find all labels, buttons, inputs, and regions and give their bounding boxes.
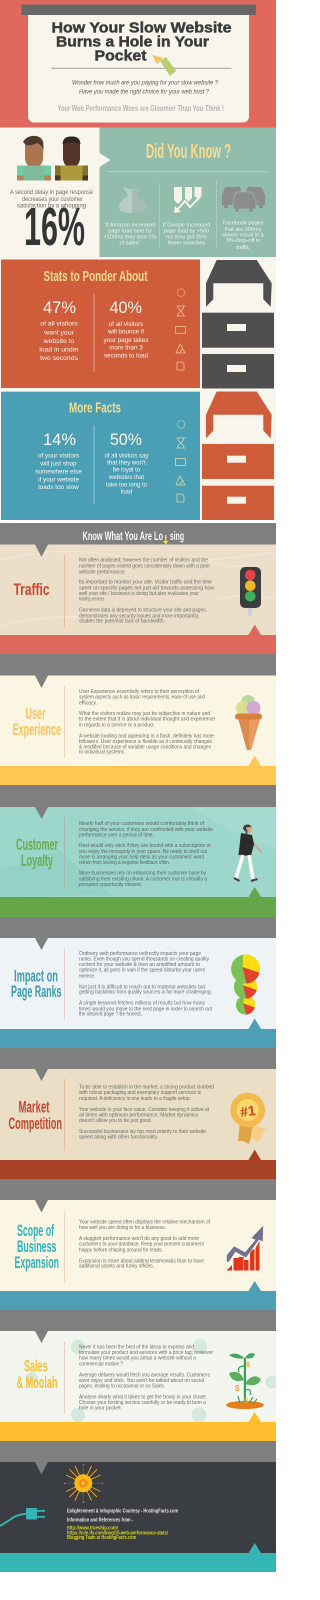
fact: Google: If Google increased: [163, 223, 210, 229]
panel: more facts: [1, 392, 200, 520]
statement text: [10, 190, 94, 210]
body text: Ordinary web performance indirectly impacts your page: [79, 951, 201, 957]
heading: Impact on: [14, 967, 58, 986]
fact: Facebook: 3%-drop-off in: [226, 238, 260, 244]
body text: More businesses rely on enhancing their customer base by: [79, 871, 206, 877]
body text: required. A deficiency is one leads to a fragile setup.: [79, 1096, 191, 1102]
icon: number one badge: #1: [239, 1102, 257, 1120]
icon: rising chart: [226, 1225, 264, 1270]
icon: yellow arrow: [163, 535, 168, 544]
reference links: http://www.trueship.com/: [67, 1525, 119, 1531]
icon: sun: [64, 1464, 103, 1503]
panel: user experience: [0, 654, 276, 785]
body text: Not often analysed; however the number of visitors and the: [79, 558, 208, 564]
subtitle questions: Have you made the right choice for your web host ?: [79, 88, 209, 96]
body text: happy before chasing around for leads.: [79, 1247, 163, 1253]
body text: [79, 1084, 214, 1141]
panel: did you know: [100, 128, 276, 257]
fact: Facebook: traffic: [236, 245, 250, 251]
icon: pencil: [152, 55, 176, 76]
body text: content for your website & then an amplified amount to: [79, 962, 200, 968]
stat 40%: of all visitors: [109, 321, 143, 328]
body text: hosting services.: [79, 597, 105, 603]
body text: efficacy.: [79, 700, 97, 706]
fact: Facebook: slower result in a: [222, 233, 265, 239]
body text: to individual systems .: [79, 750, 127, 756]
panel: traffic: [0, 523, 276, 654]
heading: Customer: [16, 835, 58, 854]
heading: Market: [18, 1098, 50, 1117]
body text: Rest would only stick if they are bound with a subscription or: [79, 843, 211, 849]
reference links: Blogging Team at HostingFacts.com: [67, 1535, 136, 1541]
body text: refrain from leaving a negative feedback often.: [79, 860, 170, 866]
body text: User Experience essentially refers to their perception of: [79, 689, 199, 695]
heading: [11, 967, 62, 1001]
body text: customers to your database. Keep your present customers: [79, 1242, 204, 1248]
title: [52, 20, 232, 64]
icon: walking person: [234, 824, 262, 881]
heading: Sales: [24, 1357, 48, 1376]
heading: [14, 1221, 59, 1272]
icon: power plug: [0, 1508, 45, 1526]
stat 50%: load: [121, 490, 132, 496]
title: Burns a Hole in Your: [56, 34, 209, 50]
heading: Experience: [12, 720, 61, 739]
body text: number of pages visited goes considerably down with a poor: [79, 564, 210, 570]
icon: falling chart: [174, 187, 202, 213]
icon: dark filing cabinet: [202, 260, 274, 388]
stat 14%: 14%: [43, 430, 76, 449]
body text: [79, 1219, 210, 1270]
panel: impact on page ranks: [0, 917, 276, 1048]
body text: pages, leading to occasional or no Sales.: [79, 1384, 165, 1390]
stat 47%: load in under: [39, 346, 79, 353]
body text: Never it has been the best of the ideas to express and: [79, 1344, 194, 1350]
stat 50%: take too long to: [106, 482, 148, 488]
body text: Nearly half of your customers would comfortably think of: [79, 821, 204, 827]
body text: [79, 689, 215, 756]
body text: Your website speed often displays the relative mechanism of: [79, 1219, 210, 1225]
heading: Scope of: [17, 1221, 54, 1240]
body text: What the visitors realize may just be subjective in nature and: [79, 711, 210, 717]
body text: more in arranging your help desk as your customers' wont: [79, 855, 204, 861]
body text: commercial motive ?: [79, 1361, 123, 1367]
panel: stats to ponder about: [1, 260, 200, 388]
body text: wont enjoy and stick. You won't be talked about on social: [79, 1378, 204, 1384]
icon: number one badge: [231, 1093, 266, 1144]
body text: changing the service, if they are confronted with poor website: [79, 827, 213, 833]
icon: cars: [222, 187, 265, 212]
fact: Facebook: that are 500ms: [225, 227, 262, 233]
reference links: [67, 1525, 168, 1541]
body text: [79, 1344, 213, 1411]
stat 47%: of all visitors: [40, 321, 78, 328]
body text: followers. User experience is flexible as it continually changes: [79, 739, 212, 745]
body text: ranks. Even though you spend thousands on creating quality: [79, 957, 209, 963]
body text: doesn't allow you to be just good.: [79, 1118, 152, 1124]
body text: Choose your hosting service carefully or be ready to burn a: [79, 1400, 206, 1406]
heading: [12, 704, 61, 739]
body text: To be able to establish in the market, a strong product clubbed: [79, 1084, 214, 1090]
heading: User: [26, 704, 46, 723]
body text: Successful businesses lay top most priority to their website: [79, 1129, 206, 1135]
stat 50%: 50%: [110, 430, 142, 449]
heading: [8, 1098, 62, 1133]
stat 40%: seconds to load: [104, 352, 149, 359]
icon: orange filing cabinet: [202, 392, 274, 520]
stat 14%: of your visitors: [38, 452, 79, 459]
fact: Facebook: [222, 220, 265, 251]
body text: how well you are doing in for a business.: [79, 1225, 166, 1231]
stat 40%: more than 3: [109, 345, 143, 352]
icon column: [176, 289, 186, 370]
body text: in regards to a service or a product.: [79, 722, 155, 728]
stat 40%: 40%: [110, 298, 142, 317]
credits text: Information and References from -: [67, 1518, 133, 1524]
icon: money plant: $: [235, 1384, 240, 1393]
stat 50%: that they won't: [107, 460, 146, 466]
body text: [79, 821, 213, 888]
body text: Its important to monitor your site. Visitor traffic and the time: [79, 580, 212, 586]
body text: additional assets and funky offices.: [79, 1264, 154, 1270]
panel: credits footer: [0, 1441, 276, 1572]
reference links: https://cdn.ify.com/blog/15-web-performance-stats/: [67, 1530, 168, 1536]
body text: hole in your pocket.: [79, 1405, 122, 1411]
body text: Garnered data is deployed to structure your site and pages,: [79, 608, 207, 614]
fact: Facebook: Facebook pages: [223, 220, 264, 226]
decorative leaf pattern: [26, 1339, 278, 1422]
body text: times would you move to the next page in order to search out: [79, 1006, 212, 1012]
heading: [16, 835, 58, 870]
big number 16%: 16%: [24, 197, 85, 257]
statement text: decreases your customer: [22, 197, 83, 203]
body text: Average delivery would fetch you average results. Customers: [79, 1372, 210, 1378]
heading: Loyalty: [21, 851, 53, 870]
stat 40%: your page takes: [104, 337, 148, 344]
body text: prospect opportunity missed.: [79, 882, 142, 888]
icon: money plant: $: [246, 1362, 250, 1369]
stat 47%: website to: [43, 338, 75, 345]
body text: A website loading and appearing in a flash, definitely has more: [79, 733, 214, 739]
icon: stacked balls: [231, 954, 260, 1015]
fact: Google: ms they get 25%: [166, 235, 207, 241]
body text: speed along with other functionality.: [79, 1135, 158, 1141]
stat 47%: two seconds: [40, 355, 78, 362]
body text: demonstrates any security issues and more importantly,: [79, 613, 199, 619]
title: How Your Slow Website: [52, 20, 232, 36]
body text: spent on specific pages not just aid towards assessing how: [79, 585, 214, 591]
fact: Amazon: +100ms they lose 1%: [104, 234, 156, 240]
fact: Google: [163, 223, 210, 246]
body text: optimize it, all goes in vain if the speed disturbs your users': [79, 967, 206, 973]
icon: two people: [17, 136, 88, 180]
panel: market competition: [0, 1048, 276, 1179]
icon: money plant: $: [244, 1398, 248, 1405]
fact: Amazon: 'If Amazon increased: [105, 223, 155, 229]
stat 14%: somewhere else: [35, 468, 82, 475]
body text: A single keyword fetches millions of results but how many: [79, 1001, 205, 1007]
body text: with robust packaging and exemplary support services is: [79, 1090, 201, 1096]
heading: Business: [17, 1237, 56, 1256]
fact: Amazon: page load time by: [108, 228, 152, 234]
body text: Not just it is difficult to reach out to material websites but: [79, 984, 206, 990]
heading: & Moolah: [16, 1373, 58, 1392]
icon: traffic light: [240, 567, 261, 616]
body text: how many times would you setup a website without a: [79, 1356, 196, 1362]
body text: all times with optimum performance. Market dynamics: [79, 1113, 198, 1119]
body text: [79, 558, 214, 625]
stat 47%: 47%: [43, 298, 76, 317]
body text: Your website is your face value. Consider keeping it active at: [79, 1107, 209, 1113]
body text: Analyse dearly what it takes to get the booty in your closet.: [79, 1394, 207, 1400]
fact: Google: page load by +500: [164, 229, 209, 235]
panel: scope of business expansion: [0, 1179, 276, 1310]
stat 50%: websites that: [108, 475, 144, 481]
body text: formulate your product and services with a price tag; however: [79, 1350, 213, 1356]
body text: satisfying their existing chunk. A customer lost is virtually a: [79, 876, 207, 882]
heading: Page Ranks: [11, 982, 62, 1001]
heading: More Facts: [69, 400, 121, 417]
section heading: know what you are losing: sing: [170, 529, 184, 543]
body text: A sluggish performance won't do any good to add more: [79, 1236, 199, 1242]
body text: the desired page ? Be honest.: [79, 1012, 142, 1018]
stat 47%: [39, 298, 79, 362]
stat 40%: will bounce if: [107, 329, 144, 336]
body text: experience.: [79, 973, 95, 979]
stat 50%: of all visitors say: [104, 453, 149, 459]
panel: second delay statistic: [0, 128, 100, 258]
body text: performance over a period of time.: [79, 833, 154, 839]
icon: money bag: [119, 187, 146, 213]
stat 14%: [35, 430, 82, 491]
body text: & modified because of variable usage conditions and changes: [79, 745, 211, 751]
heading: [16, 1357, 58, 1392]
heading: Stats to Ponder About: [44, 268, 148, 285]
body text: [79, 951, 212, 1018]
body text: system aspects such as basic requirements, ease of use and: [79, 695, 205, 701]
fact: Amazon: of sales": [120, 240, 140, 246]
stat 14%: loads too slow: [38, 484, 79, 491]
panel: customer loyalty: [0, 785, 276, 917]
panel: hero header: [0, 0, 276, 128]
stat 40%: [104, 298, 149, 359]
stat 14%: if your website: [38, 476, 79, 483]
subtitle questions: [72, 80, 218, 96]
credits text: [67, 1508, 178, 1524]
stat 50%: [104, 430, 149, 496]
body text: well your site / business is doing but also evaluates your: [79, 591, 199, 597]
stat 47%: want your: [43, 329, 74, 336]
body text: website performance.: [79, 569, 126, 575]
fact: Amazon: [104, 223, 156, 246]
body text: getting backlinks from quality sources is far more challenging.: [79, 990, 212, 996]
icon column: [176, 421, 186, 502]
body text: you enjoy the monopoly in your space. Be ready to shell out: [79, 849, 207, 855]
body text: to the extent that it is about individual thought and experience: [79, 717, 215, 723]
body text: studies the potential lack of bandwidth.: [79, 619, 165, 625]
stat 50%: be loyal to: [113, 468, 141, 474]
icon: ice cream: [235, 695, 262, 750]
heading: Traffic: [14, 580, 50, 599]
body text: Expansion is more about adding testimonials than to have: [79, 1258, 204, 1264]
heading: Expansion: [14, 1253, 59, 1272]
fact: Google: fewer searches: [168, 240, 205, 246]
icon: money plant: [226, 1353, 264, 1409]
section heading: know what you are losing: Know What You Are Lo: [82, 529, 163, 543]
panel: sales and moolah: [0, 1310, 278, 1441]
heading: Competition: [8, 1114, 62, 1133]
statement text: satisfaction by a whopping: [17, 204, 86, 210]
subtitle questions: Wonder how much are you paying for your slow website ?: [72, 80, 218, 86]
statement text: A second delay in page response: [10, 190, 94, 196]
stat 14%: will just shop: [39, 460, 77, 467]
title: Pocket: [94, 48, 147, 64]
credits text: Enlightenment & Infographic Courtesy - HostingFacts.com: [67, 1508, 178, 1514]
